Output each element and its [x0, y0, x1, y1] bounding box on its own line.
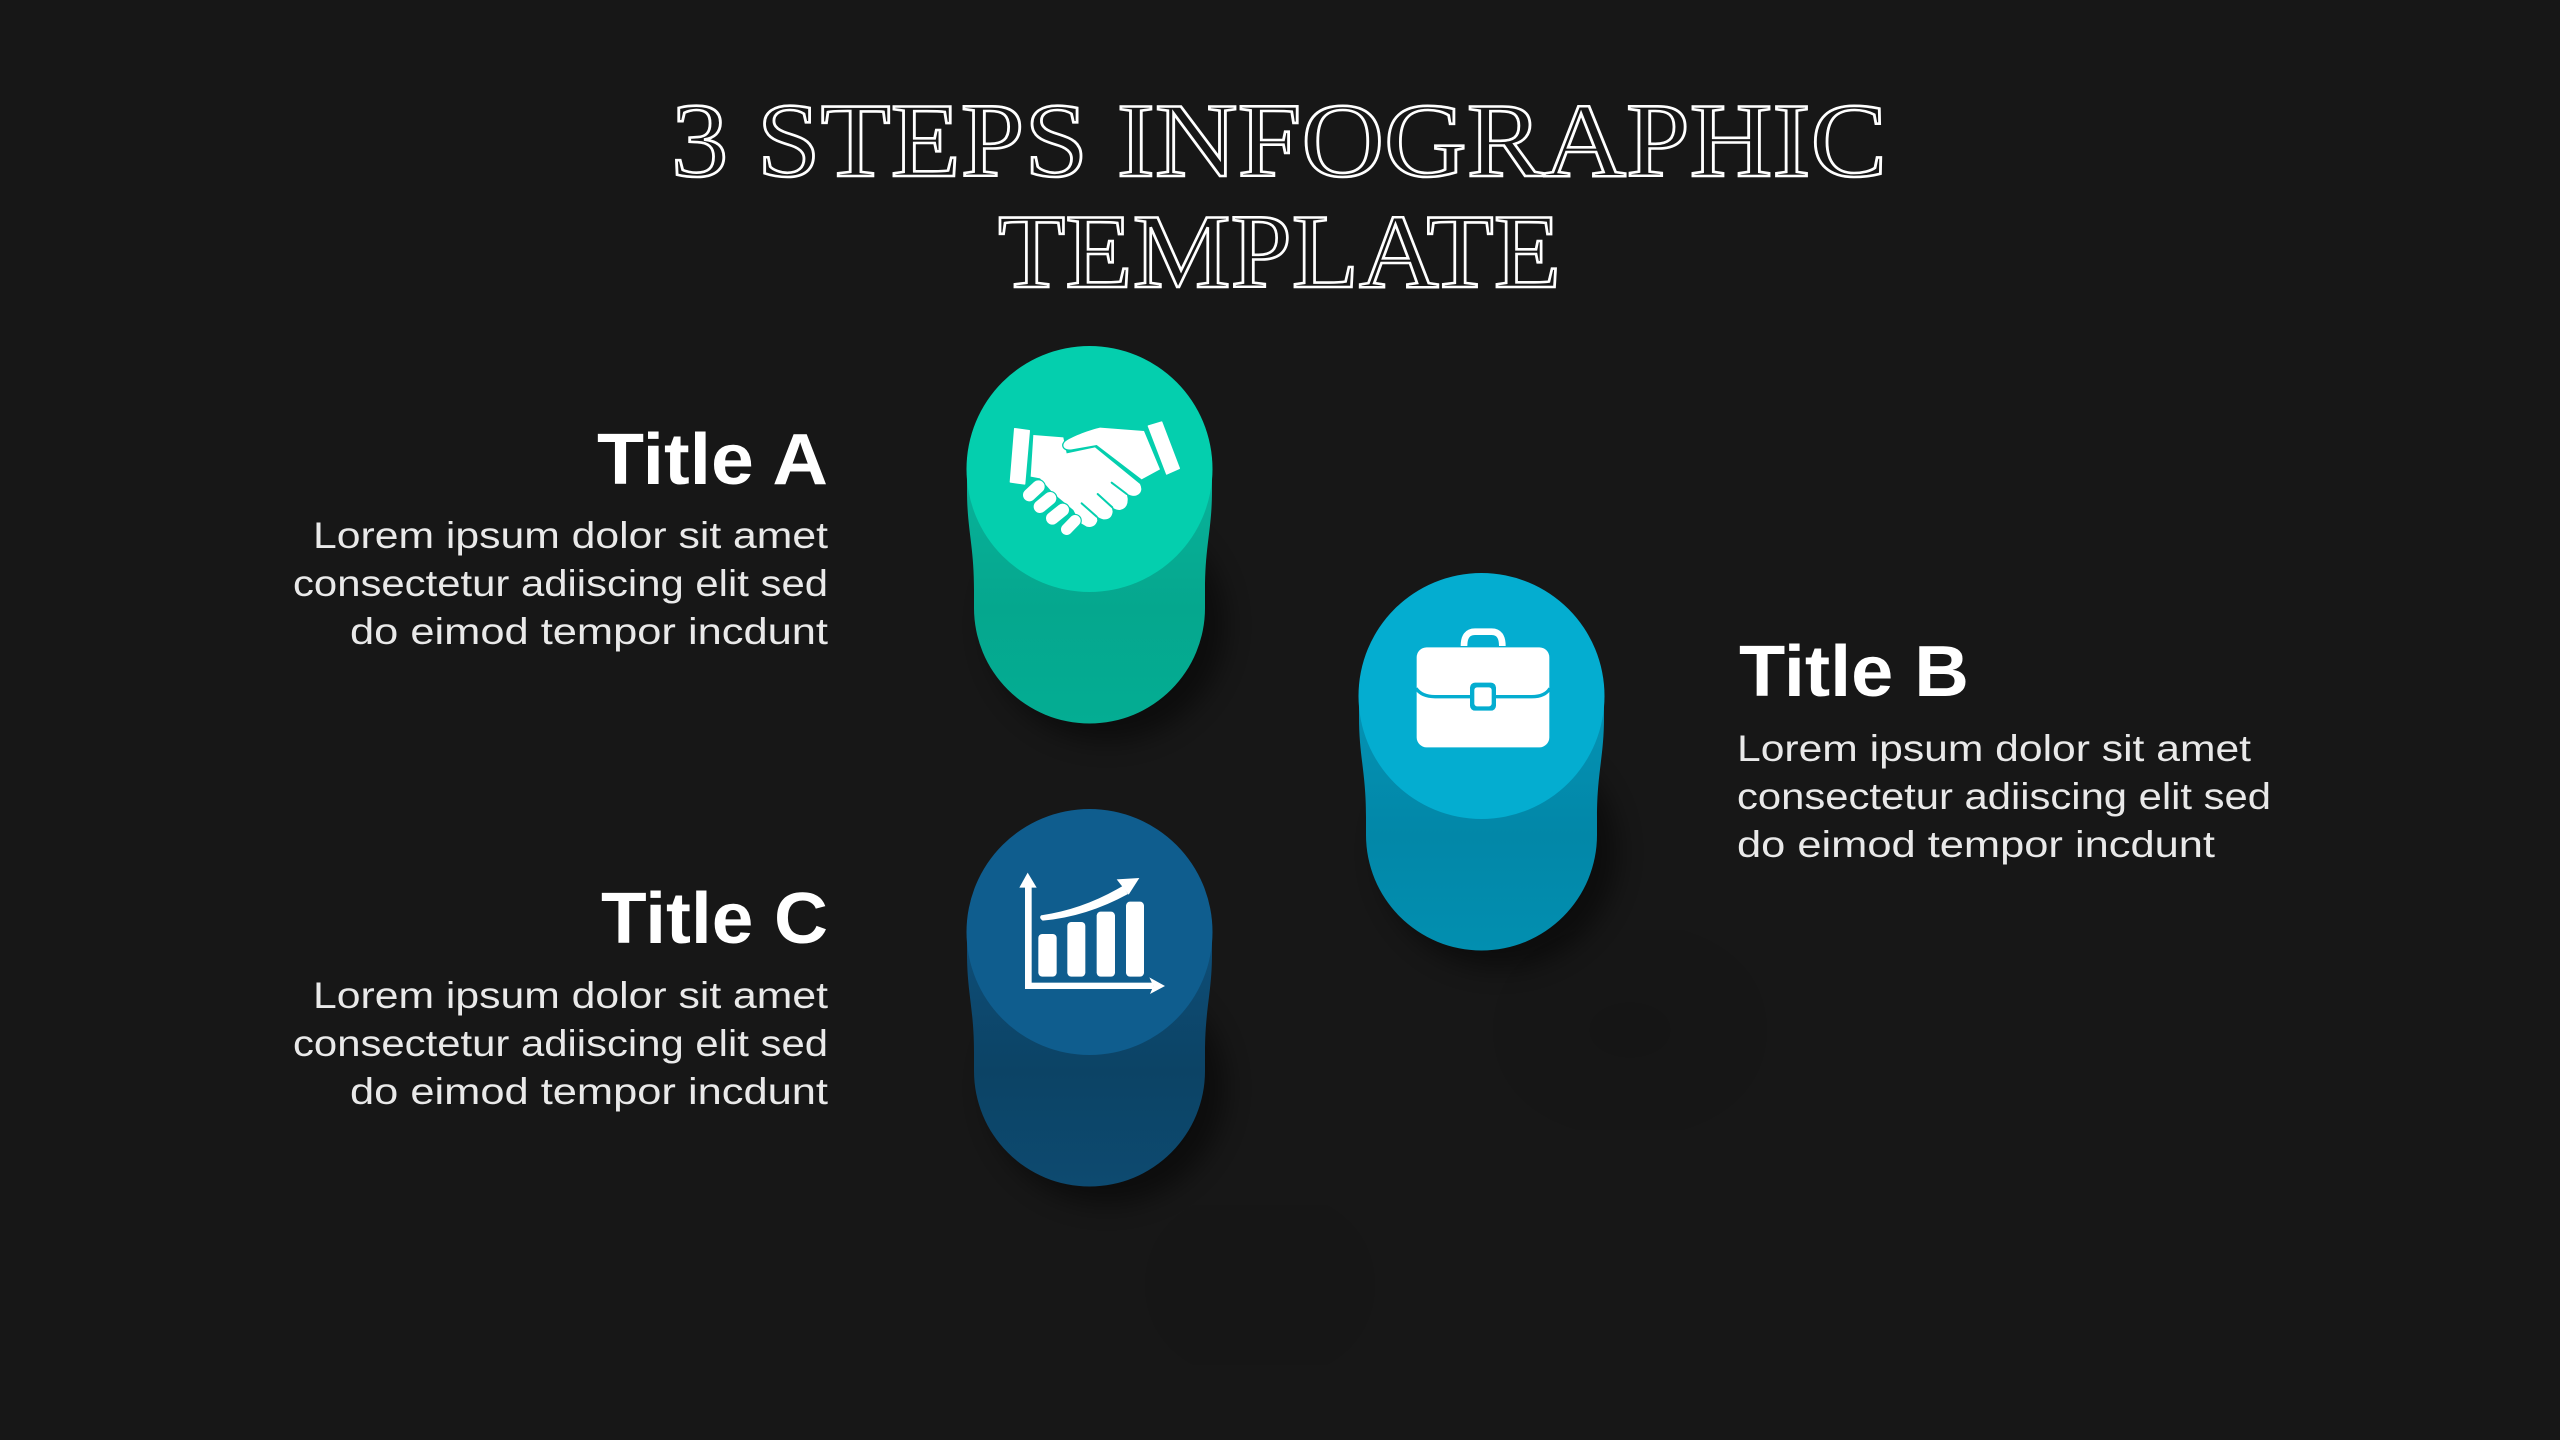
text block: step A description	[293, 515, 829, 652]
panel: step B text	[1737, 632, 2271, 865]
text block: step C description: consectetur adiiscing elit sed	[293, 1023, 828, 1064]
icon: handshake	[1010, 422, 1179, 529]
cylinder B top face	[1358, 573, 1604, 819]
text block: step B description: consectetur adiiscing elit sed	[1737, 776, 2271, 817]
title: 3 STEPS INFOGRAPHIC	[671, 82, 1887, 199]
icon: briefcase	[1416, 632, 1550, 747]
text block: step A description: do eimod tempor incdunt	[350, 611, 829, 652]
cylinder B: blue with briefcase	[1358, 573, 1720, 1080]
text block: step B description	[1737, 728, 2271, 865]
cylinder C: navy with growth chart	[966, 809, 1330, 1325]
heading: Title A: Title A	[597, 420, 828, 500]
text block: step C description: Lorem ipsum dolor sit amet	[313, 975, 829, 1016]
cylinder A body	[967, 469, 1212, 724]
cylinder B body	[1359, 696, 1604, 950]
text block: step A description: consectetur adiiscing elit sed	[293, 563, 828, 604]
cylinder A top face	[966, 346, 1212, 592]
text block: step A description: Lorem ipsum dolor sit amet	[313, 515, 829, 556]
icon: growth chart	[1019, 873, 1165, 994]
shadow: cylinder A	[989, 509, 1225, 741]
shadow: cylinder B	[1381, 736, 1720, 1080]
title	[671, 82, 1887, 310]
panel: step C text	[293, 879, 829, 1112]
shadow: cylinder C	[989, 972, 1330, 1325]
cylinder C body	[967, 932, 1212, 1186]
text block: step C description	[293, 975, 829, 1112]
heading: Title B: Title B	[1739, 632, 1969, 712]
text block: step B description: Lorem ipsum dolor sit amet	[1737, 728, 2252, 769]
title: TEMPLATE	[998, 193, 1561, 310]
cylinder A: teal with handshake	[966, 346, 1225, 741]
cylinder C top face	[966, 809, 1212, 1055]
heading: Title C: Title C	[601, 879, 828, 959]
text block: step C description: do eimod tempor incdunt	[350, 1071, 829, 1112]
text block: step B description: do eimod tempor incdunt	[1737, 824, 2216, 865]
panel: step A text	[293, 420, 829, 652]
